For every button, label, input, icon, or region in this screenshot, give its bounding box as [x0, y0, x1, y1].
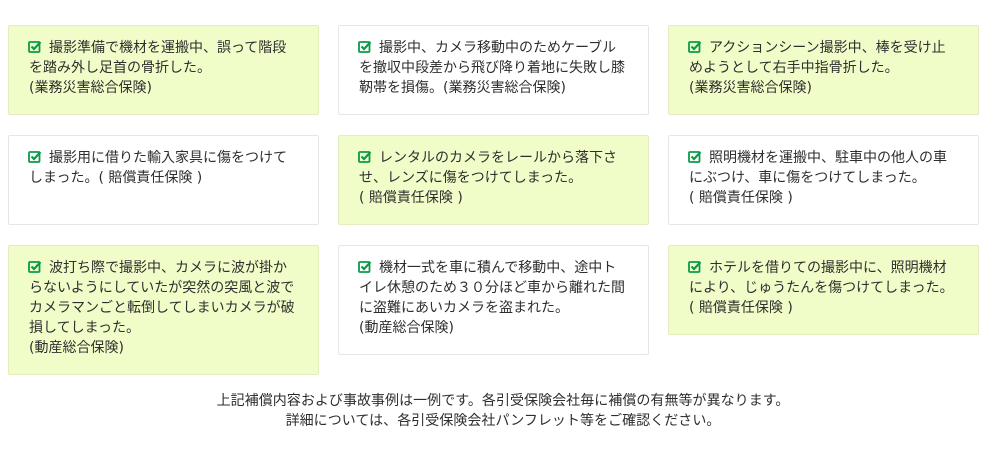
- panel: case 7: (動産総合保険): [29, 340, 124, 356]
- panel: case 1: を踏み外し足首の骨折した。: [29, 60, 211, 76]
- panel: case 7: 損してしまった。: [29, 320, 140, 336]
- panel: case 2: を撤収中段差から飛び降り着地に失敗し膝: [359, 60, 625, 76]
- panel: case 4: [8, 135, 319, 225]
- footnote: 上記補償内容および事故事例は一例です。各引受保険会社毎に補償の有無等が異なります。: [217, 393, 789, 409]
- panel: case 9: により、じゅうたんを傷つけてしまった。: [689, 280, 954, 296]
- panel: case 9: [668, 245, 979, 335]
- panel: case 8: に盗難にあいカメラを盗まれた。: [359, 300, 569, 316]
- panel: case 8: [338, 245, 649, 355]
- footnote: 詳細については、各引受保険会社パンフレット等をご確認ください。: [286, 413, 720, 429]
- panel: case 1: 撮影準備で機材を運搬中、誤って階段: [49, 40, 286, 56]
- panel: case 2: 靭帯を損傷。(業務災害総合保険): [359, 80, 566, 96]
- panel: case 6: 照明機材を運搬中、駐車中の他人の車: [709, 150, 947, 166]
- panel: case 1: [8, 25, 319, 115]
- panel: case 7: 波打ち際で撮影中、カメラに波が掛か: [49, 260, 287, 276]
- panel: case 7: [8, 245, 319, 375]
- icon: check: [688, 41, 702, 53]
- panel: case 9: ( 賠償責任保険 ): [689, 300, 793, 316]
- panel: case 9: ホテルを借りての撮影中に、照明機材: [709, 260, 947, 276]
- panel: case 8: イレ休憩のため３０分ほど車から離れた間: [359, 280, 625, 296]
- panel: case 4: 撮影用に借りた輸入家具に傷をつけて: [49, 150, 287, 166]
- panel: case 3: [668, 25, 979, 115]
- panel: case 6: [668, 135, 979, 225]
- icon: check: [358, 41, 372, 53]
- panel: case 3: アクションシーン撮影中、棒を受け止: [709, 40, 946, 56]
- icon: check: [28, 151, 42, 163]
- icon: check: [28, 261, 42, 273]
- panel: case 5: レンタルのカメラをレールから落下さ: [379, 150, 617, 166]
- panel: case 4: しまった。( 賠償責任保険 ): [29, 170, 202, 186]
- icon: check: [358, 151, 372, 163]
- panel: case 5: せ、レンズに傷をつけてしまった。: [359, 170, 582, 186]
- panel: case 2: 撮影中、カメラ移動中のためケーブル: [379, 40, 616, 56]
- icon: check: [688, 151, 702, 163]
- panel: case 7: らないようにしていたが突然の突風と波で: [29, 280, 294, 296]
- icon: check: [688, 261, 702, 273]
- footnote: [217, 392, 789, 429]
- panel: case 5: ( 賠償責任保険 ): [359, 190, 463, 206]
- icon: check: [358, 261, 372, 273]
- panel: case 2: [338, 25, 649, 115]
- panel: case 8: (動産総合保険): [359, 320, 454, 336]
- panel: case 6: ( 賠償責任保険 ): [689, 190, 793, 206]
- panel: case 3: (業務災害総合保険): [689, 80, 812, 96]
- panel: case 6: にぶつけ、車に傷をつけてしまった。: [689, 170, 926, 186]
- panel: case 5: [338, 135, 649, 225]
- panel: case 8: 機材一式を車に積んで移動中、途中ト: [379, 260, 616, 276]
- icon: check: [28, 41, 42, 53]
- panel: case 3: めようとして右手中指骨折した。: [689, 60, 899, 76]
- panel: case 1: (業務災害総合保険): [29, 80, 152, 96]
- panel: case 7: カメラマンごと転倒してしまいカメラが破: [29, 300, 295, 316]
